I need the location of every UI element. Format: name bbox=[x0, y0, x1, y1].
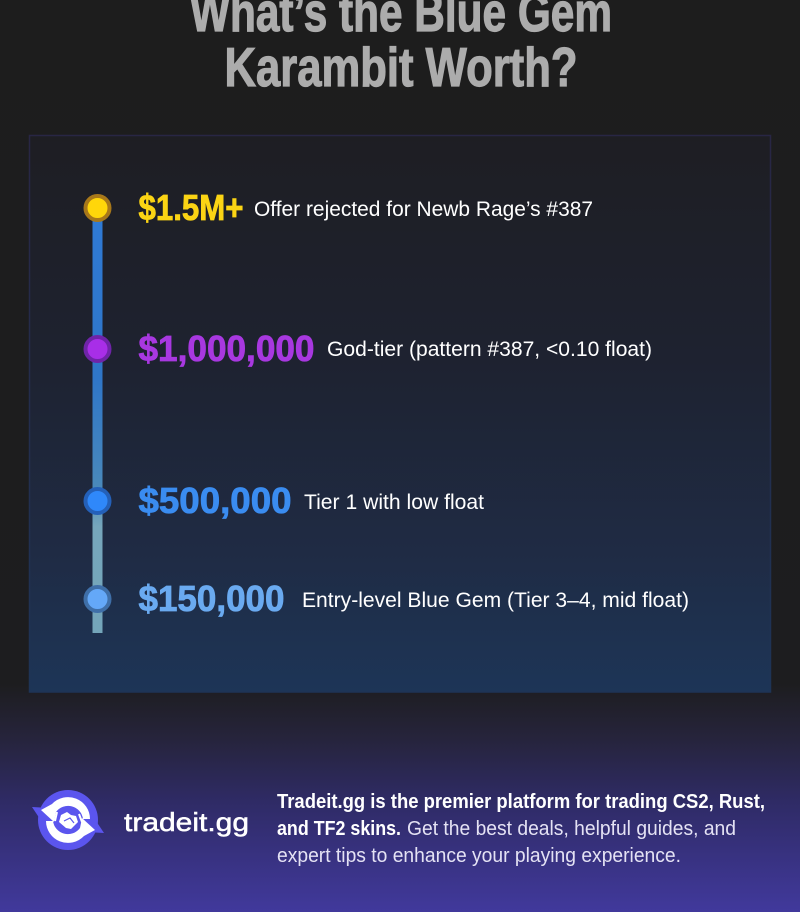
icon: tradeit logo bbox=[32, 790, 104, 850]
row: $500,000: $500,000 bbox=[138, 480, 292, 521]
footer description: Get the best deals, helpful guides, and bbox=[407, 817, 736, 840]
title: Karambit Worth? bbox=[224, 36, 578, 98]
timeline line bbox=[92, 208, 102, 633]
marker: $1.5M+ bbox=[86, 196, 110, 220]
row: $1.5M+: $1.5M+ bbox=[138, 187, 244, 228]
footer description bbox=[277, 790, 765, 867]
row: $1.5M+: Offer rejected for Newb Rage’s #387 bbox=[254, 197, 593, 221]
marker: $150,000 bbox=[86, 587, 110, 611]
panel: price timeline bbox=[30, 136, 770, 692]
row: $1,000,000: $1,000,000 bbox=[138, 328, 314, 369]
row: $150,000: Entry-level Blue Gem (Tier 3–4, mid float) bbox=[302, 588, 689, 612]
marker: $1,000,000 bbox=[86, 337, 110, 361]
brand name: tradeit.gg bbox=[124, 807, 249, 837]
row: $150,000 bbox=[138, 578, 689, 619]
row: $1,000,000: God-tier (pattern #387, <0.10 float) bbox=[327, 337, 652, 361]
title bbox=[190, 0, 612, 98]
footer description: and TF2 skins. bbox=[277, 817, 401, 840]
row: $500,000: Tier 1 with low float bbox=[304, 490, 484, 514]
marker: $500,000 bbox=[86, 489, 110, 513]
row: $1,000,000 bbox=[138, 328, 652, 369]
footer description: expert tips to enhance your playing experience. bbox=[277, 844, 681, 867]
row: $500,000 bbox=[138, 480, 484, 521]
row: $150,000: $150,000 bbox=[138, 578, 284, 619]
row: $1.5M+ bbox=[138, 187, 593, 228]
